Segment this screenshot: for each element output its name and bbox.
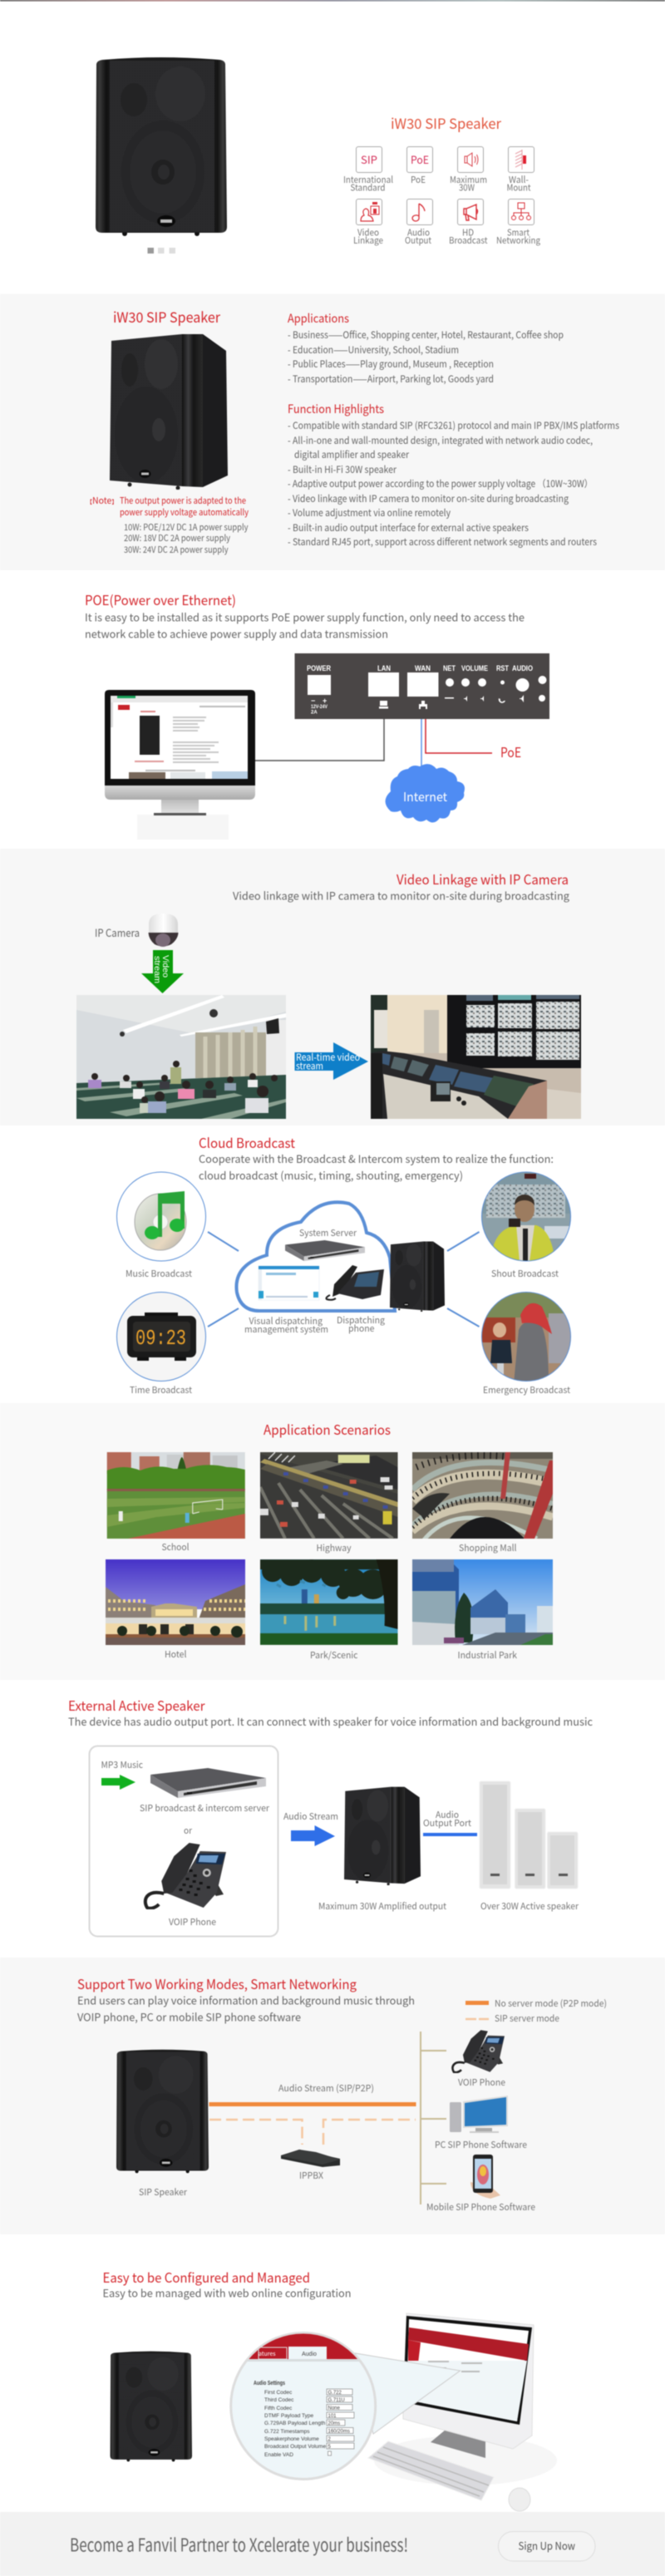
label: audio output port: Audio	[436, 1808, 459, 1821]
speaker in cloud	[390, 1241, 445, 1312]
note on output power: 【Note】	[86, 495, 117, 507]
heading: POE: POE(Power over Ethernet)	[85, 589, 236, 609]
device back panel: RST	[496, 664, 509, 672]
audio settings form: G.729AB Payload Length	[264, 2421, 326, 2426]
icon: HD broadcast	[457, 199, 484, 224]
label: PC SIP phone software: PC SIP Phone Software	[435, 2138, 527, 2151]
audio settings form: Third Codec	[264, 2397, 294, 2403]
audio settings form: G.711U	[328, 2398, 345, 2403]
feature labels: Audio	[407, 226, 430, 239]
green video stream arrow	[141, 950, 184, 993]
label: park/scenic: Park/Scenic	[310, 1648, 358, 1662]
feature labels: Smart	[507, 226, 530, 239]
label: VOIP phone: VOIP Phone	[169, 1915, 216, 1928]
configuration description: Easy to be managed with web online configuration	[103, 2284, 351, 2301]
internet cloud	[386, 764, 465, 823]
PC endpoint	[450, 2096, 508, 2133]
icon: smart networking	[509, 199, 534, 224]
heading: Applications: Applications	[288, 310, 349, 327]
device back panel: LAN	[377, 664, 391, 672]
applications list	[288, 328, 564, 386]
device back panel: VOLUME	[461, 664, 488, 672]
magnified settings view	[229, 2332, 377, 2479]
label: audio output port: Output Port	[423, 1816, 471, 1830]
circle labels: Emergency Broadcast	[483, 1383, 570, 1396]
function highlights list: - All-in-one and wall-mounted design, integrated with network audio codec,	[288, 434, 593, 447]
feature labels	[343, 173, 541, 247]
function highlights list: - Built-in Hi-Fi 30W speaker	[288, 463, 397, 476]
green video stream arrow: Video	[160, 955, 170, 978]
column speakers	[480, 1781, 578, 1889]
label: mobile SIP phone software: Mobile SIP Phone Software	[426, 2200, 535, 2214]
audio settings form: G.722	[328, 2391, 342, 2396]
audio settings form: G.722 Timestamps	[264, 2429, 310, 2435]
circle: emergency broadcast	[482, 1292, 572, 1384]
feature labels: HD	[462, 226, 474, 239]
feature labels: Mount	[507, 181, 530, 195]
label: audio output port	[423, 1808, 471, 1830]
feature labels: Video	[357, 226, 379, 239]
feature labels: PoE	[411, 173, 426, 186]
function highlights list: - Compatible with standard SIP (RFC3261) protocol and main IP PBX/IMS platforms	[288, 419, 619, 432]
legend: No server mode (P2P mode)	[495, 1997, 607, 2010]
output labels	[318, 1899, 579, 1913]
cloud broadcast description: cloud broadcast (music, timing, shouting, emergency)	[199, 1167, 463, 1183]
photo: monitoring control room	[370, 994, 582, 1120]
function highlights list: - Volume adjustment via online remotely	[288, 506, 451, 520]
device back panel: NET	[443, 664, 456, 672]
dispatching phone	[326, 1265, 384, 1300]
keyboard	[368, 2441, 494, 2500]
label: IP camera: IP Camera	[95, 924, 140, 940]
applications list: - Public Places——Play ground, Museum , Reception	[288, 357, 494, 371]
footer message: Become a Fanvil Partner to Xcelerate your business!	[70, 2530, 408, 2557]
blue cloud outline	[236, 1202, 395, 1311]
note on output power: The output power is adapted to the	[120, 495, 246, 507]
note on output power: power supply voltage automatically	[120, 506, 249, 519]
audio settings form: 160/20ms	[328, 2429, 350, 2434]
icon: SIP international standard	[356, 146, 382, 173]
circle: time broadcast: 09:23	[135, 1326, 186, 1351]
computer with admin page	[374, 2313, 557, 2485]
label: audio stream: Audio Stream	[283, 1810, 338, 1823]
VOIP phone	[145, 1843, 226, 1909]
function highlights list: - Standard RJ45 port, support across different network segments and routers	[288, 535, 597, 549]
feature labels: International	[343, 173, 393, 186]
speaker	[110, 2352, 192, 2461]
label: SIP server: SIP broadcast & intercom server	[140, 1801, 270, 1815]
photo: highway	[259, 1451, 399, 1539]
section: application scenarios	[0, 1403, 665, 1680]
connection cables	[255, 719, 492, 771]
POE description: network cable to achieve power supply and data transmission	[85, 625, 388, 642]
cloud broadcast description	[199, 1150, 554, 1183]
blue real-time stream arrow	[294, 1042, 368, 1080]
sign up button: Sign Up Now	[519, 2537, 576, 2554]
heading: external active speaker: External Active Speaker	[68, 1695, 205, 1715]
photo: hotel	[105, 1559, 246, 1646]
mini web page on screen	[111, 696, 248, 779]
POE description	[85, 608, 525, 642]
speaker angled photo	[110, 334, 228, 490]
amplified speaker	[344, 1787, 421, 1885]
label: school: School	[161, 1540, 190, 1554]
label: IPPBX: IPPBX	[299, 2169, 324, 2182]
applications list: - Transportation——Airport, Parking lot, Goods yard	[288, 372, 494, 386]
label: MP3 music: MP3 Music	[101, 1758, 143, 1771]
sign up button	[499, 2532, 595, 2561]
circle: time broadcast	[116, 1292, 206, 1382]
function highlights list: - Adaptive output power according to the power supply voltage （10W~30W）	[288, 477, 593, 490]
cloud labels: Visual dispatching	[249, 1314, 323, 1327]
endpoint bus	[421, 2032, 446, 2204]
audio settings form: Fifth Codec	[264, 2406, 293, 2411]
legend	[466, 1997, 607, 2025]
output labels: Over 30W Active speaker	[480, 1899, 579, 1913]
heading: easy to configure: Easy to be Configured and Managed	[103, 2267, 310, 2287]
label: shopping mall: Shopping Mall	[459, 1541, 517, 1554]
icon: video linkage	[356, 199, 382, 224]
cloud labels: management system	[244, 1322, 328, 1336]
internet cloud: Internet	[403, 788, 447, 805]
section: working modes	[0, 1958, 665, 2234]
function highlights list: - Video linkage with IP camera to monitor on-site during broadcasting	[288, 492, 569, 505]
VOIP phone endpoint	[452, 2030, 505, 2072]
audio settings form	[254, 2379, 354, 2458]
feature labels: Wall-	[509, 173, 529, 186]
label: PoE: PoE	[500, 741, 521, 761]
label: audio stream SIP/P2P: Audio Stream (SIP/P2P)	[278, 2081, 374, 2095]
magnifier beam	[356, 2353, 461, 2434]
system server device	[285, 1240, 365, 1261]
audio settings form: 101	[328, 2414, 337, 2419]
external speaker description: The device has audio output port. It can connect with speaker for voice information and background music	[68, 1713, 593, 1729]
photo: industrial park	[411, 1559, 554, 1646]
label: SIP speaker: SIP Speaker	[139, 2185, 188, 2199]
icon: audio output	[407, 199, 432, 224]
device back panel: AUDIO	[512, 664, 533, 672]
photo: park	[259, 1559, 399, 1646]
dispatching software screen	[259, 1266, 319, 1300]
note on output power: 10W: POE/12V DC 1A power supply	[124, 521, 249, 534]
green video stream arrow: stream	[152, 956, 162, 983]
working modes description: VOIP phone, PC or mobile SIP phone software	[77, 2008, 301, 2025]
applications list: - Business——Office, Shopping center, Hotel, Restaurant, Coffee shop	[288, 328, 564, 342]
green arrow	[101, 1775, 135, 1790]
feature labels: Linkage	[353, 234, 383, 247]
icon: SIP international standard: SIP	[361, 151, 377, 167]
function highlights list: digital amplifier and speaker	[294, 448, 409, 461]
audio settings form: DTMF Payload Type	[264, 2413, 314, 2419]
section: web configuration	[103, 2267, 557, 2511]
audio settings form: 2	[328, 2437, 331, 2442]
blue output bar	[423, 1833, 477, 1836]
working modes description	[77, 1992, 415, 2025]
section: cloud broadcast	[116, 1132, 572, 1396]
circle labels: Time Broadcast	[130, 1383, 192, 1396]
legend: SIP server mode	[495, 2012, 559, 2025]
circle labels: Music Broadcast	[126, 1267, 192, 1280]
audio settings form: First Codec	[264, 2390, 293, 2396]
photo: school	[106, 1451, 246, 1539]
note on output power: 20W: 18V DC 2A power supply	[124, 532, 230, 544]
heading: working modes: Support Two Working Modes, Smart Networking	[77, 1973, 357, 1993]
carousel dots	[148, 248, 175, 254]
footer call to action	[0, 2512, 665, 2576]
heading: iW30 SIP Speaker: iW30 SIP Speaker	[113, 306, 220, 327]
circle: music broadcast	[116, 1172, 206, 1261]
section: product overview	[0, 0, 665, 254]
connector lines	[208, 1232, 479, 1327]
output labels: Maximum 30W Amplified output	[318, 1899, 446, 1913]
note on output power: 30W: 24V DC 2A power supply	[124, 544, 229, 556]
SIP server device	[150, 1768, 266, 1798]
device back panel: 2A	[311, 710, 318, 715]
POE description: It is easy to be installed as it supports PoE power supply function, only need to access the	[85, 608, 525, 625]
function highlights list: - Built-in audio output interface for external active speakers	[288, 521, 529, 534]
label: highway: Highway	[316, 1541, 352, 1554]
label: or: or	[184, 1824, 193, 1837]
source devices box	[90, 1746, 278, 1937]
product title: iW30 SIP Speaker	[391, 112, 501, 133]
icon: dome camera	[148, 914, 178, 947]
audio settings form: Speakerphone Volume	[264, 2436, 319, 2442]
section: external active speaker	[68, 1695, 593, 1937]
device back panel: −	[311, 697, 315, 705]
feature labels: Broadcast	[449, 234, 487, 247]
blue real-time stream arrow: Real-time video	[296, 1051, 360, 1064]
icon: wall mount	[509, 146, 534, 173]
cloud broadcast description: Cooperate with the Broadcast & Intercom system to realize the function:	[199, 1150, 554, 1166]
section: video linkage	[0, 849, 665, 1125]
audio settings form: Enable VAD	[264, 2452, 293, 2458]
feature labels: Networking	[496, 234, 541, 247]
device back panel	[294, 653, 549, 719]
cloud labels: phone	[348, 1322, 374, 1335]
photo: shopping mall	[411, 1451, 554, 1539]
section: POE	[85, 589, 549, 840]
label: system server: System Server	[299, 1226, 357, 1239]
video linkage description: Video linkage with IP camera to monitor on-site during broadcasting	[233, 888, 570, 903]
mobile endpoint	[470, 2155, 500, 2199]
SIP speaker	[116, 2050, 209, 2173]
magnified settings view: atures	[259, 2350, 276, 2358]
blue real-time stream arrow: stream	[296, 1059, 323, 1072]
function highlights list	[288, 419, 619, 549]
desktop monitor	[105, 690, 255, 840]
note on output power	[86, 495, 249, 556]
device back panel: POWER	[307, 664, 331, 672]
section: applications and function highlights	[0, 294, 665, 570]
audio settings form: 5	[328, 2445, 331, 2450]
label: industrial park: Industrial Park	[457, 1648, 517, 1662]
applications list: - Education——University, School, Stadium	[288, 343, 459, 357]
audio settings form: 20ms	[328, 2421, 340, 2426]
audio settings form: Audio Settings	[254, 2379, 285, 2386]
circle labels: Shout Broadcast	[491, 1267, 559, 1280]
speaker front photo	[96, 57, 227, 236]
orange P2P line	[209, 2102, 416, 2106]
cloud labels: Dispatching	[337, 1313, 386, 1327]
working modes description: End users can play voice information and background music through	[77, 1992, 415, 2008]
photo: exam classroom	[76, 995, 287, 1120]
heading: video linkage: Video Linkage with IP Camera	[397, 869, 569, 889]
blue audio arrow	[291, 1825, 335, 1846]
feature icon grid	[343, 146, 541, 247]
device back panel: 12V-24V	[311, 705, 328, 710]
feature labels: 30W	[459, 181, 475, 195]
feature labels: Maximum	[450, 173, 487, 186]
icon: PoE	[407, 146, 432, 173]
audio settings form: Broadcast Output Volume	[264, 2444, 326, 2450]
IPPBX device	[281, 2150, 340, 2167]
icon: PoE: PoE	[411, 151, 429, 167]
feature labels: Output	[405, 234, 431, 247]
cloud labels	[244, 1313, 386, 1336]
device back panel: +	[323, 697, 327, 705]
heading: cloud broadcast: Cloud Broadcast	[199, 1132, 295, 1152]
circle labels	[126, 1267, 570, 1396]
audio settings form: None	[328, 2406, 341, 2411]
heading: Function Highlights: Function Highlights	[288, 401, 384, 417]
heading: application scenarios: Application Scenarios	[264, 1419, 391, 1439]
circle: shout broadcast	[482, 1172, 570, 1263]
magnified settings view: Audio	[302, 2352, 317, 2357]
feature labels: Standard	[351, 181, 386, 195]
label: VOIP phone endpoint: VOIP Phone	[458, 2076, 505, 2089]
label: hotel: Hotel	[165, 1648, 186, 1661]
mouse	[509, 2488, 530, 2511]
dashed SIP server line	[209, 2120, 416, 2145]
icon: speaker 30W	[457, 146, 484, 173]
device back panel: WAN	[415, 664, 431, 672]
